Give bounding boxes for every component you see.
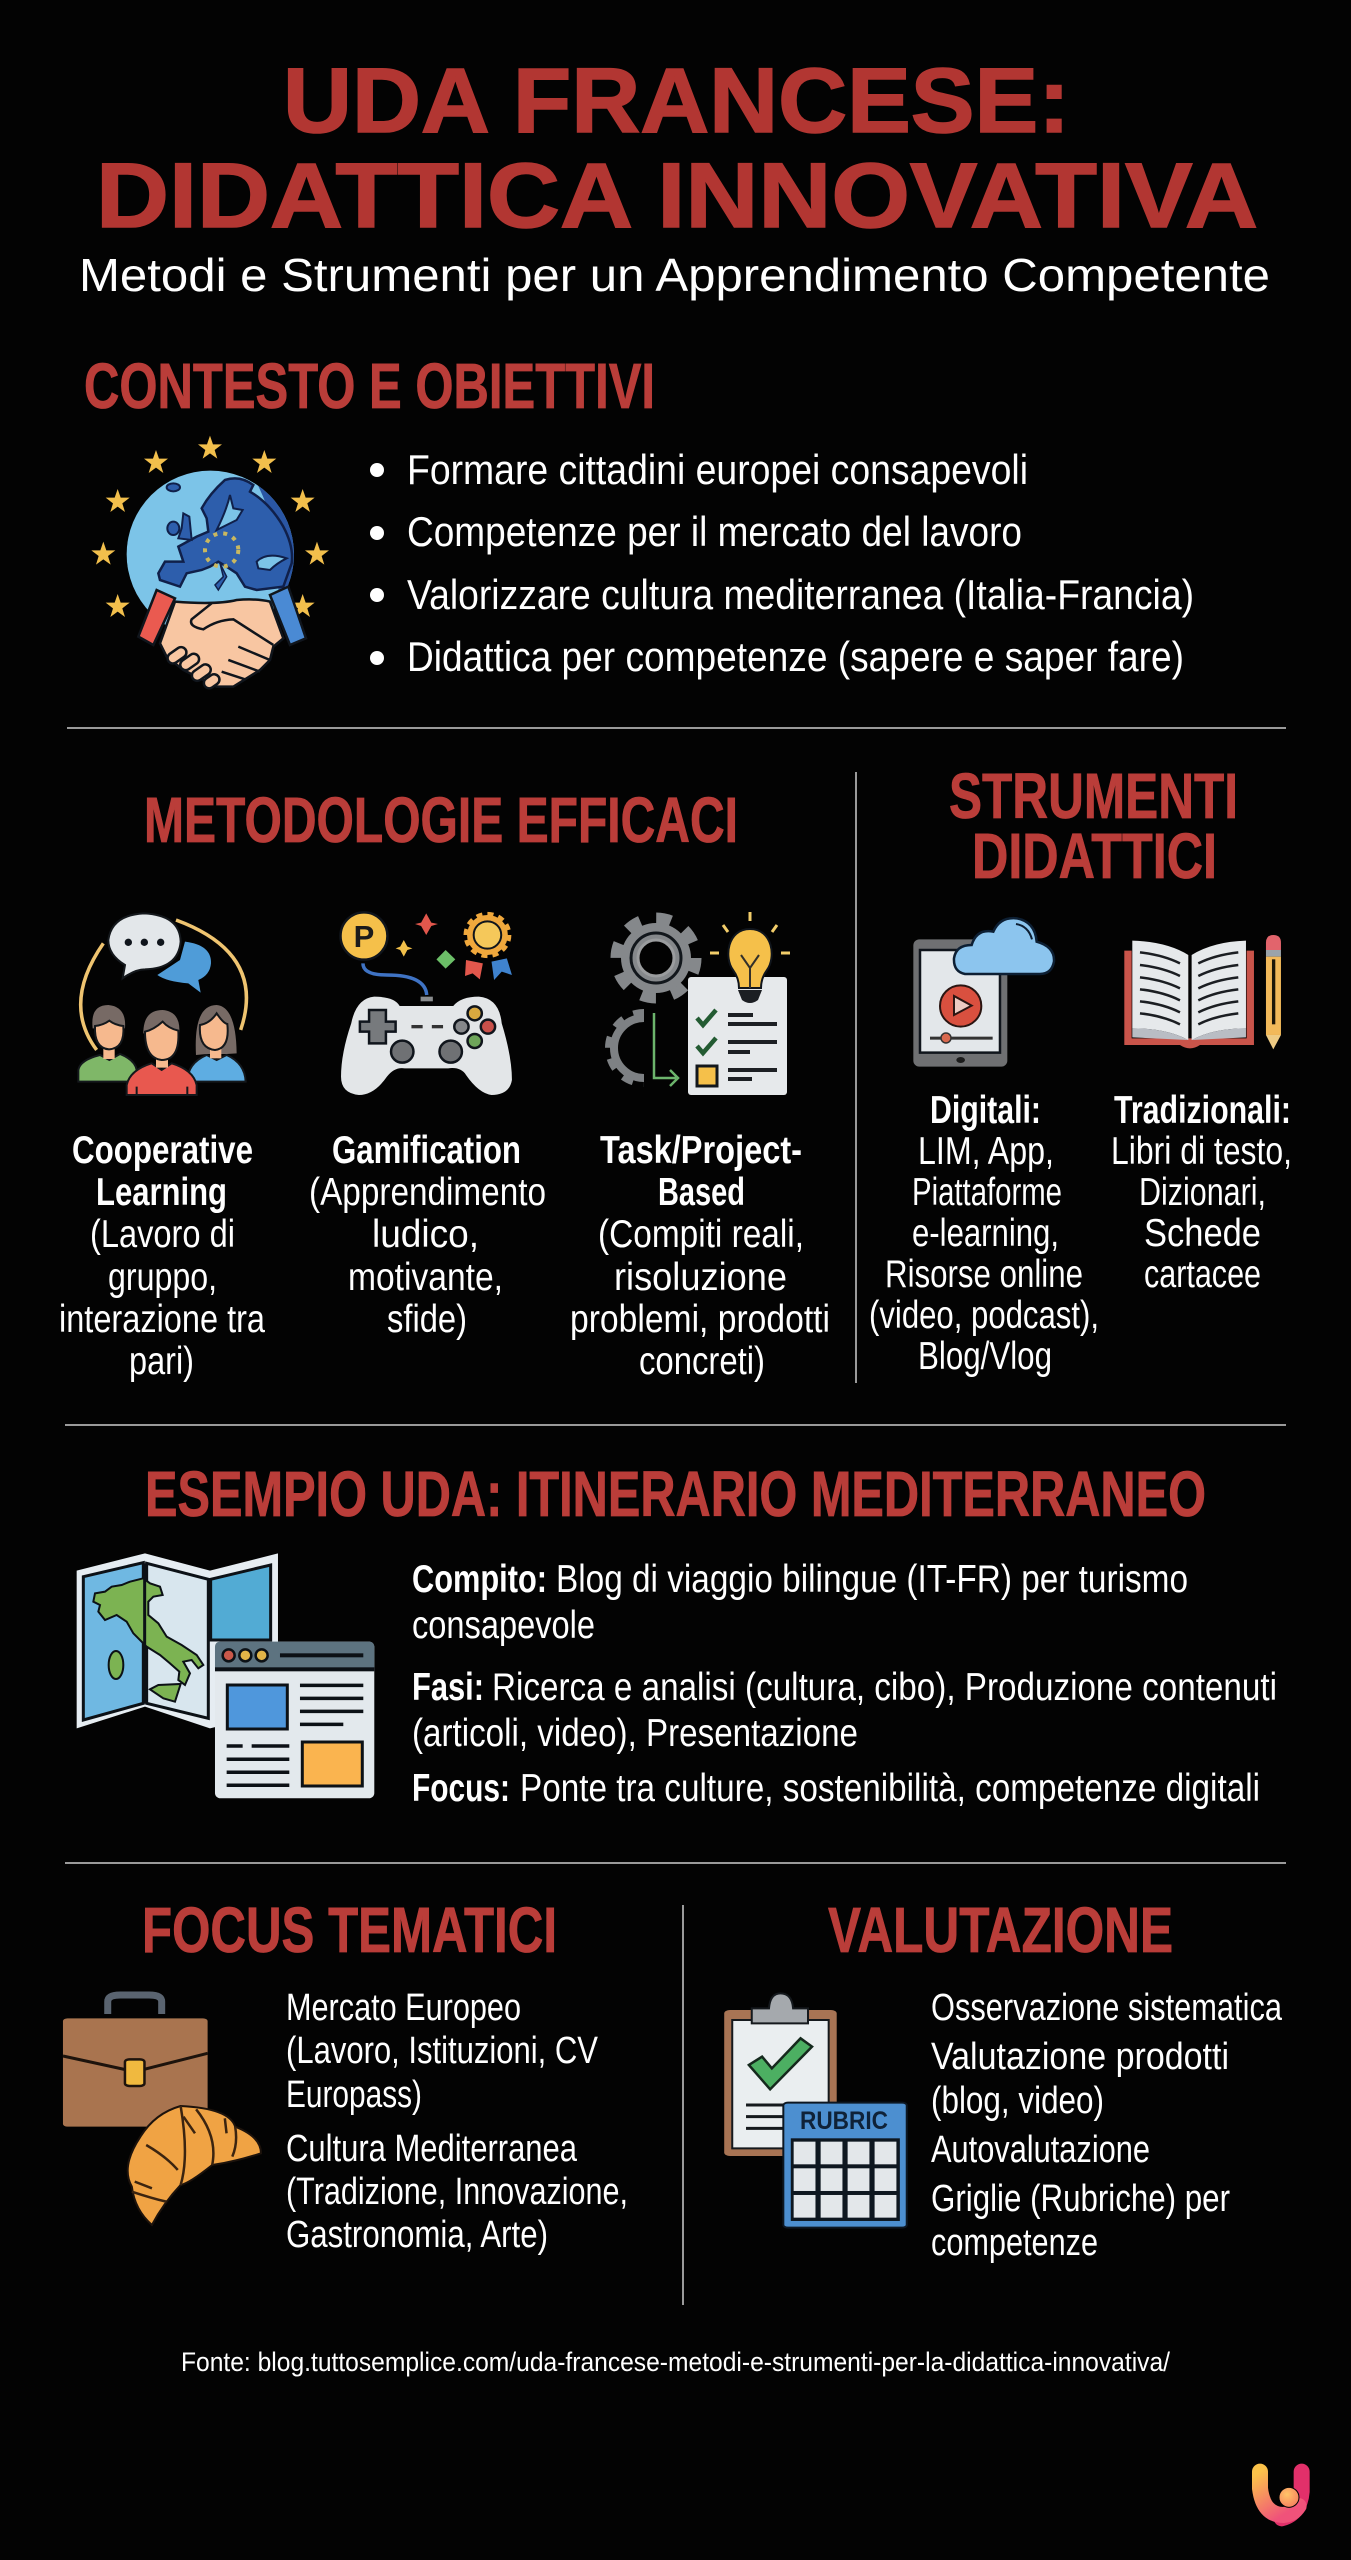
icon: tablet and cloud (913, 918, 1054, 1067)
heading: focus tematici: FOCUS TEMATICI (142, 1894, 557, 1966)
text: cooperative learning: interazione tra (59, 1298, 265, 1341)
icon: logo (1260, 2472, 1302, 2518)
heading: contesto e obiettivi: CONTESTO E OBIETTIVI (84, 350, 655, 422)
heading: strumenti didattici (949, 760, 1238, 892)
text: cooperative learning (59, 1129, 265, 1383)
icon: book and pencil (1124, 935, 1281, 1049)
text: cooperative learning: pari) (129, 1340, 194, 1383)
title: UDA FRANCESE: (283, 50, 1070, 152)
text: esempio uda details (412, 1558, 1277, 1810)
list: objectives (370, 446, 1194, 680)
list: objectives: Competenze per il mercato del lavoro (407, 508, 1022, 555)
text: valutazione: Osservazione sistematica (931, 1987, 1283, 2029)
text: digitali: Piattaforme (912, 1171, 1062, 1214)
text: focus tematici (286, 1987, 628, 2256)
text: digitali: Blog/Vlog (918, 1335, 1052, 1378)
text: valutazione: Valutazione prodotti (931, 2036, 1229, 2078)
text: valutazione: Autovalutazione (931, 2129, 1150, 2171)
text: focus tematici: Mercato Europeo (286, 1987, 521, 2029)
heading: metodologie efficaci: METODOLOGIE EFFICACI (144, 784, 738, 856)
text: valutazione: (blog, video) (931, 2080, 1104, 2122)
text: cooperative learning: Learning (96, 1171, 227, 1214)
icon: clipboard and rubric: RUBRIC (800, 2107, 888, 2135)
text: focus tematici: Europass) (286, 2074, 422, 2116)
list: objectives: Didattica per competenze (sapere e saper fare) (407, 633, 1184, 680)
text: gamification: Gamification (332, 1129, 521, 1172)
text: esempio uda details: Focus: (412, 1767, 510, 1810)
text: digitali (869, 1089, 1099, 1378)
subtitle: Metodi e Strumenti per un Apprendimento Competente (79, 249, 1270, 301)
text: esempio uda details: Compito: (412, 1558, 547, 1601)
title: DIDATTICA INNOVATIVA (96, 145, 1258, 247)
text: digitali: LIM, App, (918, 1130, 1054, 1173)
text: digitali: e-learning, (912, 1212, 1059, 1255)
text: gamification: sfide) (387, 1298, 467, 1341)
text: esempio uda details: Fasi: (412, 1666, 484, 1709)
text: digitali: Digitali: (930, 1089, 1041, 1132)
text: tradizionali: Dizionari, (1139, 1171, 1266, 1214)
text: valutazione: competenze (931, 2222, 1098, 2264)
text: gamification (309, 1129, 546, 1341)
text: digitali: Risorse online (885, 1253, 1083, 1296)
icon: clipboard and rubric (724, 1993, 907, 2228)
text: digitali: (video, podcast), (869, 1294, 1099, 1337)
icon: task and project (609, 912, 790, 1095)
text: gamification: ludico, (372, 1213, 479, 1256)
footer source: Fonte: blog.tuttosemplice.com/uda-francese-metodi-e-strumenti-per-la-didattica-innovativa/ (181, 2347, 1170, 2377)
text: cooperative learning: Cooperative (72, 1129, 253, 1172)
text: esempio uda details: Blog di viaggio bilingue (IT-FR) per turismo (556, 1558, 1188, 1601)
text: task/project-based: concreti) (639, 1340, 765, 1383)
icon: globe with stars and handshake (91, 436, 329, 690)
heading: valutazione: VALUTAZIONE (828, 1894, 1173, 1966)
text: focus tematici: (Tradizione, Innovazione, (286, 2171, 628, 2213)
text: valutazione: Griglie (Rubriche) per (931, 2178, 1230, 2220)
text: task/project-based: risoluzione (614, 1256, 787, 1299)
heading: strumenti didattici: STRUMENTI (949, 760, 1238, 832)
text: tradizionali: Libri di testo, (1111, 1130, 1292, 1173)
text: cooperative learning: gruppo, (108, 1256, 217, 1299)
text: tradizionali: Tradizionali: (1114, 1089, 1291, 1132)
icon: map and browser window (77, 1553, 374, 1798)
text: gamification: motivante, (348, 1256, 503, 1299)
heading: strumenti didattici: DIDATTICI (972, 820, 1217, 892)
text: focus tematici: Gastronomia, Arte) (286, 2214, 548, 2256)
text: task/project-based: problemi, prodotti (570, 1298, 830, 1341)
icon: briefcase and croissant (63, 1995, 261, 2225)
text: focus tematici: (Lavoro, Istituzioni, CV (286, 2030, 599, 2072)
text: task/project-based (570, 1129, 830, 1383)
title (96, 50, 1258, 247)
text: cooperative learning: (Lavoro di (90, 1213, 235, 1256)
icon: cooperative learning group (78, 913, 246, 1095)
text: tradizionali: Schede (1144, 1212, 1261, 1255)
text: focus tematici: Cultura Mediterranea (286, 2128, 578, 2170)
text: task/project-based: Task/Project- (600, 1129, 802, 1172)
text: valutazione (931, 1987, 1283, 2264)
text: esempio uda details: consapevole (412, 1604, 595, 1647)
list: objectives: Formare cittadini europei consapevoli (407, 446, 1028, 493)
text: tradizionali (1111, 1089, 1292, 1296)
text: esempio uda details: (articoli, video), Presentazione (412, 1712, 858, 1755)
text: task/project-based: (Compiti reali, (598, 1213, 804, 1256)
text: gamification: (Apprendimento (309, 1171, 546, 1214)
text: tradizionali: cartacee (1144, 1253, 1261, 1296)
text: task/project-based: Based (658, 1171, 745, 1214)
icon: gamification controller (341, 912, 512, 1095)
list: objectives: Valorizzare cultura mediterranea (Italia-Francia) (407, 571, 1194, 618)
icon: gamification controller: P (354, 919, 374, 954)
